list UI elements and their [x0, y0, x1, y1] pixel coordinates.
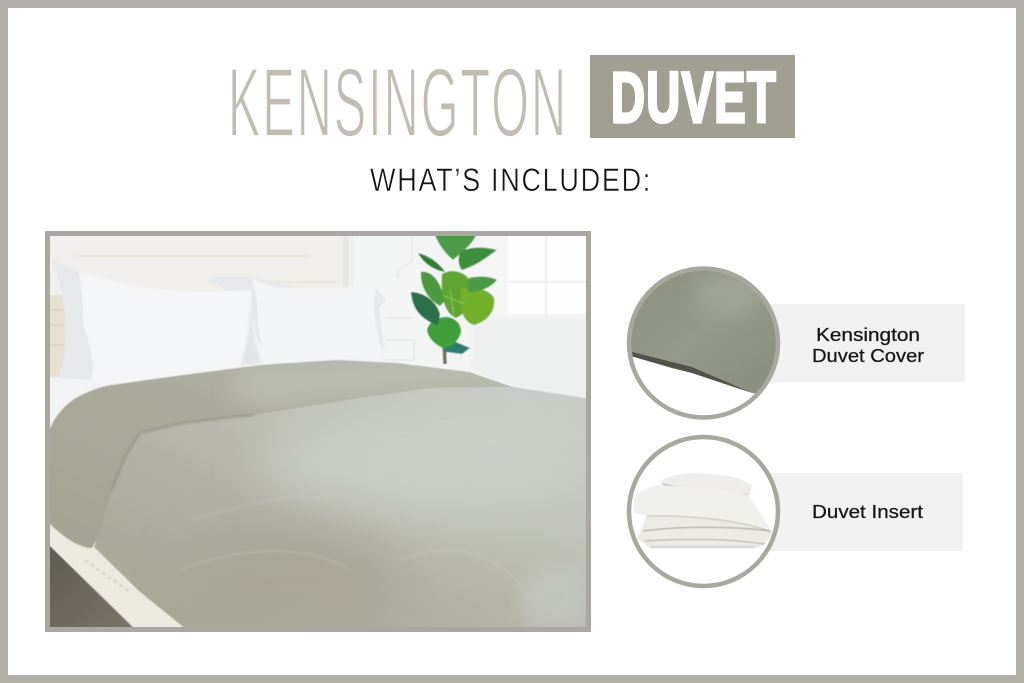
duvet fold — [44, 355, 519, 555]
badge: Duvet — [590, 55, 795, 138]
label text: Kensington — [816, 325, 920, 345]
wrinkles — [188, 514, 348, 569]
label bar — [770, 473, 963, 551]
panel: bed photo — [44, 230, 595, 636]
subheading: WHAT’S INCLUDED: — [370, 162, 652, 198]
duvet main — [90, 380, 595, 636]
back pillow centre — [210, 278, 386, 353]
plant — [411, 230, 497, 364]
circle: insert — [629, 437, 778, 586]
heading: Kensington: KENSINGTON — [228, 48, 568, 157]
sheet — [44, 378, 112, 440]
pillow left — [80, 272, 251, 380]
label text — [812, 325, 924, 366]
item: duvet cover — [625, 260, 965, 418]
back pillow left — [52, 262, 94, 380]
warm shaded patch — [241, 517, 386, 604]
pillow right — [251, 277, 385, 364]
label bar — [770, 304, 965, 382]
item: duvet insert — [629, 437, 963, 586]
headboard — [44, 230, 349, 377]
wall — [50, 236, 480, 627]
label text: Duvet Cover — [812, 346, 924, 366]
window and curtain — [509, 236, 586, 312]
bed frame — [50, 524, 183, 627]
fold shadow — [111, 415, 254, 492]
label text: Duvet Insert — [812, 502, 923, 522]
wall panels — [352, 236, 414, 360]
badge: Duvet: DUVET — [611, 59, 777, 138]
light patch — [260, 418, 542, 528]
title — [228, 48, 795, 157]
floor — [50, 545, 134, 627]
circle: fabric — [625, 260, 785, 418]
